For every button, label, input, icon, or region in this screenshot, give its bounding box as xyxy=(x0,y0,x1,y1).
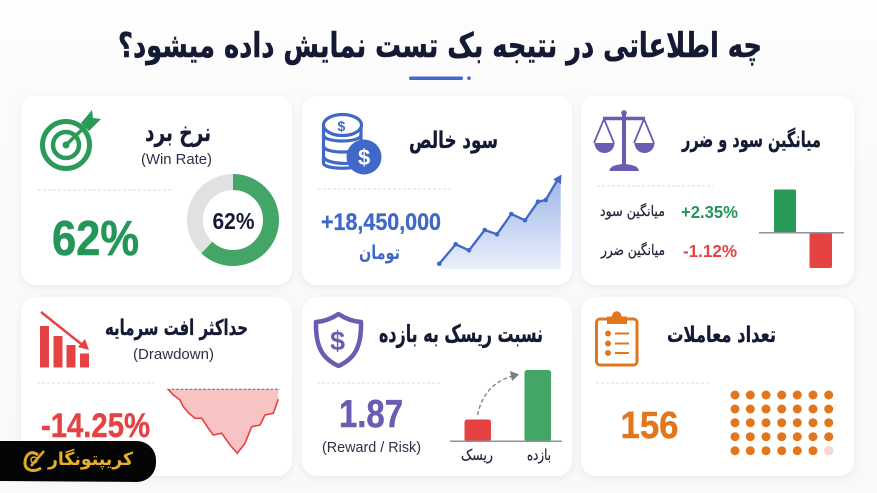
icon: shield xyxy=(316,314,361,366)
heading: trade count: تعداد معاملات xyxy=(667,323,776,348)
panel: win rate xyxy=(21,96,292,285)
icon: coins: $ xyxy=(358,145,370,170)
chart: drawdown area xyxy=(167,389,280,453)
title underline xyxy=(409,76,471,80)
panel: drawdown xyxy=(21,297,292,476)
subheading: drawdown: (Drawdown) xyxy=(133,347,214,363)
value: 62%: 62% xyxy=(52,212,139,266)
value: ratio: 1.87 xyxy=(339,393,403,436)
value: drawdown: -14.25% xyxy=(41,407,150,445)
donut label: 62% xyxy=(212,208,254,234)
value: average loss: -1.12% xyxy=(683,241,737,261)
chart: equity line xyxy=(437,174,562,269)
heading: net profit: سود خالص xyxy=(409,128,498,154)
arrow: risk to reward xyxy=(478,371,519,415)
label: risk: ریسک xyxy=(461,446,493,464)
brand name: کریپتونگار xyxy=(47,448,133,470)
panel: average profit and loss xyxy=(581,96,854,285)
panel: trade count xyxy=(581,297,854,476)
chart: risk and reward bars xyxy=(450,370,562,464)
chart: donut xyxy=(195,182,271,258)
label: average loss: میانگین ضرر xyxy=(600,242,665,259)
panel: net profit xyxy=(302,96,572,285)
heading: risk reward ratio: نسبت ریسک به بازده xyxy=(379,320,543,348)
icon: scales xyxy=(594,110,654,171)
chart: profit and loss bars xyxy=(759,190,844,268)
chart: dot grid xyxy=(730,390,833,455)
badge: brand xyxy=(0,441,156,482)
subheading: win rate: (Win Rate) xyxy=(141,152,212,168)
icon: brand logo xyxy=(25,451,44,470)
icon: target xyxy=(42,110,101,168)
heading: drawdown: حداکثر افت سرمایه xyxy=(105,316,248,341)
icon: coins: $ xyxy=(338,118,346,134)
unit: toman: تومان xyxy=(359,242,400,264)
panel: risk reward ratio xyxy=(302,297,572,476)
icon: clipboard xyxy=(596,311,637,365)
caption: reward over risk: (Reward / Risk) xyxy=(322,439,421,456)
value: trade count: 156 xyxy=(620,405,678,447)
label: average profit: میانگین سود xyxy=(600,203,665,220)
icon: shield: $ xyxy=(330,326,345,356)
value: net profit: +18,450,000 xyxy=(321,209,441,236)
value: average profit: +2.35% xyxy=(681,202,738,222)
icon: falling bars xyxy=(40,312,89,368)
icon: coins xyxy=(324,114,382,174)
label: reward: بازده xyxy=(527,446,551,464)
heading: win rate: نرخ برد xyxy=(145,118,211,148)
